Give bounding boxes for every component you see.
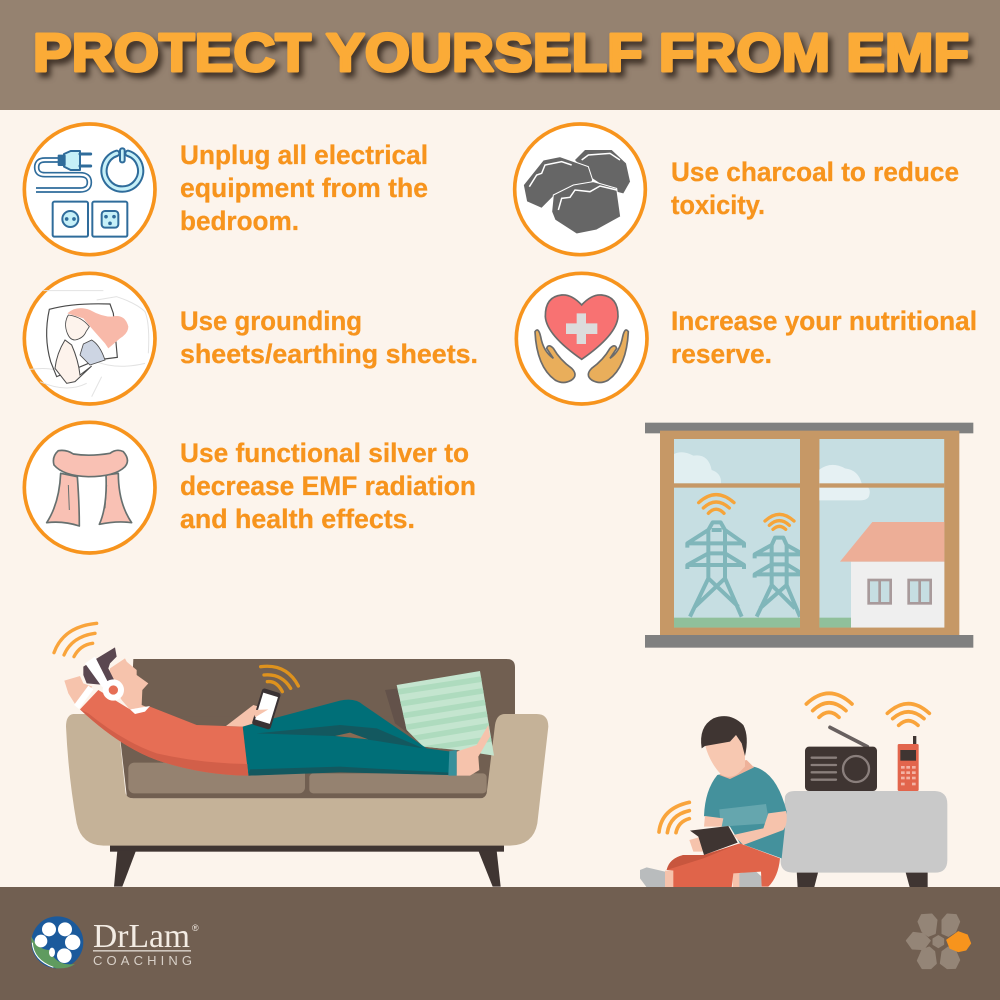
text: grounding sheets <box>180 306 478 369</box>
boy: tablet <box>690 826 738 855</box>
logo mark <box>31 916 83 968</box>
boy: shirt <box>704 767 787 858</box>
wifi above head <box>54 623 97 657</box>
boy: socks and feet <box>640 867 762 887</box>
wifi signals <box>659 693 929 833</box>
wifi above phone <box>261 666 298 692</box>
text: unplug: Unplug all electrical <box>180 140 428 170</box>
man: shirt <box>80 690 248 776</box>
man: hand on phone <box>226 705 270 727</box>
cordless phone <box>898 736 919 791</box>
side table <box>781 791 947 888</box>
text: functional silver: decrease EMF radiation <box>180 471 476 501</box>
boy: face <box>705 735 745 777</box>
right window pane <box>817 439 947 628</box>
man: foot <box>457 725 490 776</box>
sofa with reclining man <box>54 623 548 887</box>
boy: hair <box>701 716 747 756</box>
left window pane <box>670 439 803 628</box>
footer band <box>0 887 1000 1000</box>
boy: shirt pocket <box>719 804 769 827</box>
man: hand, face and hair <box>64 647 150 712</box>
icon: plug, power and sockets <box>24 124 155 255</box>
boy: arms <box>689 811 787 852</box>
sofa cushions <box>128 763 487 793</box>
radio <box>805 727 877 791</box>
header band <box>0 0 1000 110</box>
text: functional silver <box>180 438 476 534</box>
man: pants <box>243 700 451 776</box>
text: charcoal: toxicity. <box>671 190 765 220</box>
sofa legs <box>110 845 504 887</box>
sofa base and arms <box>66 714 548 846</box>
title: PROTECT YOURSELF FROM EMF <box>33 23 969 83</box>
boy with tablet, radio and phone <box>640 693 947 888</box>
window scene <box>645 423 973 648</box>
man: phone <box>252 688 281 730</box>
text: nutritional reserve: Increase your nutritional <box>671 306 977 336</box>
icon: heart and hands <box>516 273 647 404</box>
text: functional silver: Use functional silver to <box>180 438 469 468</box>
icon: sleeping woman <box>24 273 155 404</box>
icon: charcoal <box>515 124 645 255</box>
text: functional silver: and health effects. <box>180 504 415 534</box>
logo wordmark <box>93 918 199 968</box>
logo wordmark: DrLam <box>93 918 190 955</box>
text: nutritional reserve <box>671 306 977 369</box>
text: charcoal: Use charcoal to reduce <box>671 157 959 187</box>
text: grounding sheets: Use grounding <box>180 306 362 336</box>
icon: flower <box>907 914 971 968</box>
text: grounding sheets: sheets/earthing sheets. <box>180 339 478 369</box>
man: cuff, collar and headphone cup <box>74 679 150 714</box>
text: nutritional reserve: reserve. <box>671 339 772 369</box>
icon: scarf <box>24 422 155 553</box>
sofa back <box>127 659 515 797</box>
logo wordmark: COACHING <box>93 953 192 968</box>
logo wordmark: ® <box>192 923 199 933</box>
boy: pants <box>667 843 780 887</box>
text: unplug: bedroom. <box>180 206 299 236</box>
striped pillow <box>385 671 495 756</box>
text: unplug: equipment from the <box>180 173 428 203</box>
text: charcoal <box>671 157 959 220</box>
text: unplug <box>180 140 428 236</box>
boy: neck <box>719 760 754 779</box>
